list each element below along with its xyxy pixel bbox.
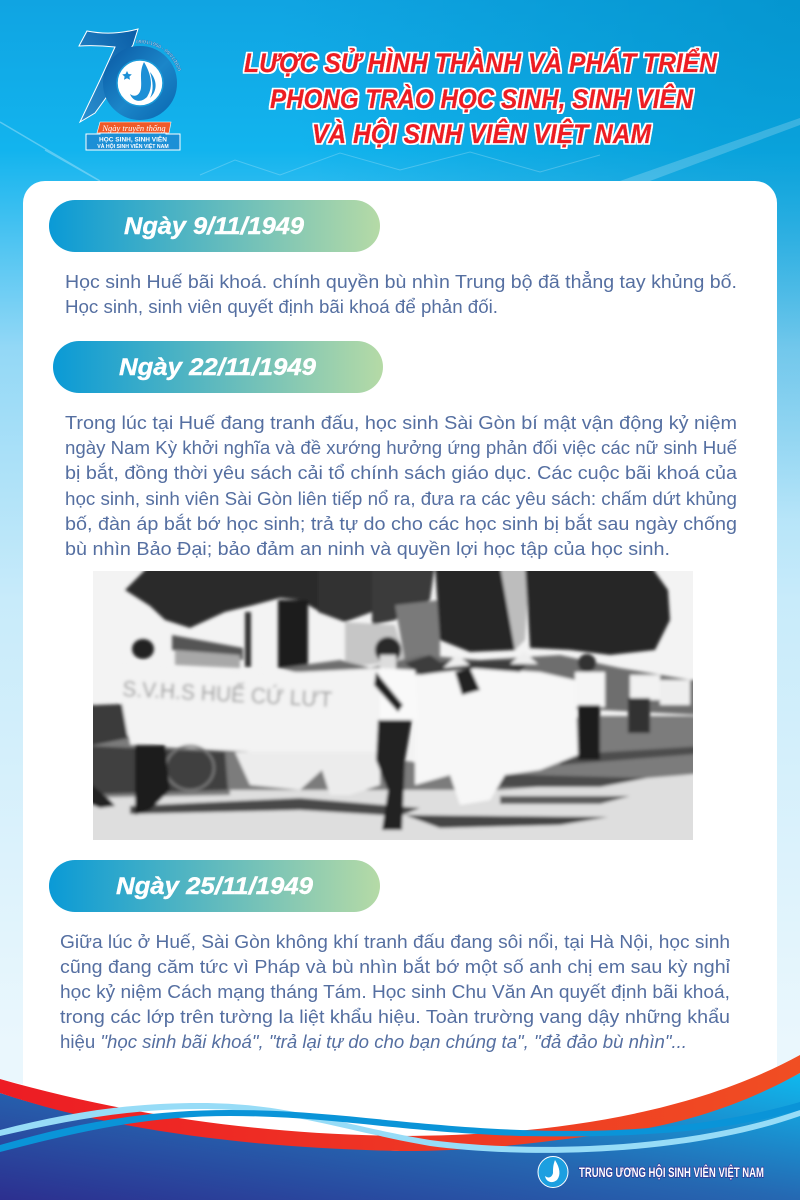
logo caption: tradition day: HỌC SINH, SINH VIÊN: [99, 134, 167, 144]
tree canopy: [123, 571, 321, 630]
text block: 25/11/1949: hiệu "học sinh bãi khoá", "trả lại tự do cho bạn chúng ta", "đả đảo bù nhìn"...: [60, 1032, 687, 1052]
light blue ribbon: [0, 1103, 800, 1153]
text block: 22/11/1949: [65, 413, 738, 559]
icon: number zero ring: [110, 53, 170, 113]
heading: 22/11/1949: [53, 341, 383, 393]
marcher in the foreground: [374, 637, 418, 830]
footer logo and organisation name: [538, 1156, 764, 1188]
title: LƯỢC SỬ HÌNH THÀNH VÀ PHÁT TRIỂN: [244, 46, 717, 78]
footer wave band: [0, 1055, 800, 1200]
text block: 22/11/1949: ngày Nam Kỳ khởi nghĩa và đề xướng hưởng ứng phản đối việc các nữ sinh Huế: [65, 438, 737, 458]
logo: 70 years emblem: [78, 28, 182, 150]
title: PHONG TRÀO HỌC SINH, SINH VIÊN: [270, 83, 693, 114]
logo caption: tradition day: [86, 122, 180, 150]
blue footer field: [0, 1073, 800, 1200]
ground: [93, 776, 693, 840]
text block: 22/11/1949: bị bắt, đồng thời yêu sách cải tổ chính sách giáo dục. Các cuộc bãi khoá của: [65, 462, 738, 483]
heading: 9/11/1949: Ngày 9/11/1949: [124, 213, 305, 240]
panel: white content card: [23, 181, 777, 1141]
photo: student march: S.V.H.S HUẾ CỨ LƯT: [122, 676, 333, 712]
text block: 22/11/1949: học sinh, sinh viên Sài Gòn liên tiếp nổ ra, đưa ra các yêu sách: chấm dứt khủng: [65, 489, 737, 509]
logo caption: tradition day: Ngày truyền thống: [101, 123, 166, 133]
icon: flame emblem: [122, 62, 156, 101]
right marcher: [575, 654, 690, 760]
banner: [116, 660, 404, 752]
photo: student march: [93, 571, 693, 840]
text block: 25/11/1949: Giữa lúc ở Huế, Sài Gòn không khí tranh đấu đang sôi nổi, tại Hà Nội, học sinh: [60, 932, 730, 952]
text block: 9/11/1949: Học sinh, sinh viên quyết định bãi khoá để phản đối.: [65, 297, 498, 317]
red ribbon: [0, 1055, 800, 1151]
text block: 9/11/1949: Học sinh Huế bãi khoá. chính quyền bù nhìn Trung bộ đã thẳng tay khủng bố.: [65, 271, 737, 292]
heading: 9/11/1949: [49, 200, 380, 252]
icon: number seven: [79, 29, 138, 122]
white underlay: [0, 1055, 800, 1160]
title: [244, 46, 717, 149]
mid blue ribbon: [0, 1102, 800, 1152]
long shadows on the road: [130, 798, 420, 816]
logo caption: tradition day: VÀ HỘI SINH VIÊN VIỆT NAM: [97, 142, 169, 150]
text block: 22/11/1949: bù nhìn Bảo Đại; bảo đảm an ninh và quyền lợi học tập của học sinh.: [65, 539, 670, 559]
text block: 25/11/1949: trong các lớp trên tường la liệt khẩu hiệu. Toàn trường vang dậy những khẩu: [60, 1007, 730, 1027]
ring date text: 09/01/1950 - 09/01/2020: [136, 40, 182, 71]
text block: 25/11/1949: cũng đang căm tức vì Pháp và bù nhìn bắt bớ một số anh chị em sau kỳ nghỉ: [60, 956, 730, 977]
text block: 22/11/1949: Trong lúc tại Huế đang tranh đấu, học sinh Sài Gòn bí mật vận động kỷ niệm: [65, 413, 737, 433]
girls in white: [415, 668, 578, 805]
bicycle and left figures: [93, 702, 130, 747]
heading: 22/11/1949: Ngày 22/11/1949: [119, 354, 317, 381]
title: VÀ HỘI SINH VIÊN VIỆT NAM: [312, 118, 651, 149]
dark zone below the banner and trail on the right: [70, 715, 720, 798]
text block: 22/11/1949: bố, đàn áp bắt bớ học sinh; trả tự do cho các học sinh bị bắt sau ngày chống: [65, 513, 737, 534]
background crowd: [280, 655, 720, 716]
text block: 25/11/1949: học kỷ niệm Cách mạng tháng Tám. Học sinh Chu Văn An quyết định bãi khoá,: [60, 982, 730, 1002]
icon: association emblem: [538, 1156, 568, 1188]
heading: 25/11/1949: Ngày 25/11/1949: [116, 873, 314, 900]
heading: 25/11/1949: [49, 860, 380, 912]
text block: 9/11/1949: [65, 271, 737, 317]
text block: 25/11/1949: [60, 932, 730, 1052]
